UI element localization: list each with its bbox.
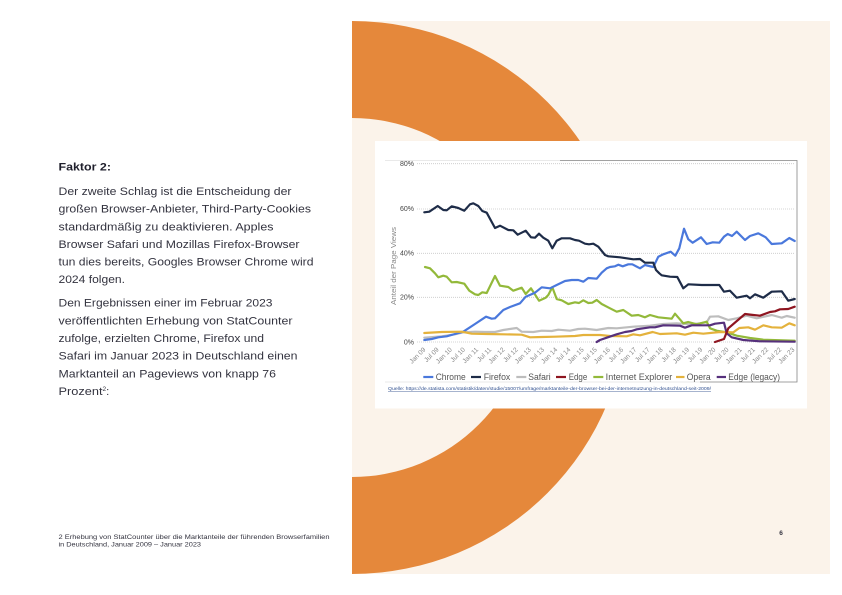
text block: second paragraph: Safari im Januar 2023 in Deutschland einen: [58, 351, 298, 363]
y axis labels and gridlines: 80%: [400, 161, 414, 168]
text block: second paragraph: veröffentlichten Erhebung von StatCounter: [58, 315, 293, 327]
text block: second paragraph: :: [106, 386, 109, 398]
text block: first paragraph: Der zweite Schlag ist die Entscheidung der: [58, 186, 292, 198]
x axis labels: Jul 12: [502, 346, 520, 364]
x axis labels: Jan 11: [462, 346, 480, 365]
series: Edge: [715, 307, 795, 342]
text block: second paragraph: [58, 298, 298, 398]
footnote: 2 Erhebung von StatCounter über die Marktanteile der führenden Browserfamilien: [58, 534, 330, 541]
x axis labels: Jul 09: [423, 346, 441, 364]
panel: beige background: [352, 21, 830, 574]
source link: Quelle: https://de.statista.com/statistik/daten/studie/15007/umfrage/marktanteile-der-browser-bei-der-internetnutzung-in-deutschland-seit-2009/: [388, 386, 712, 391]
x axis labels: Jan 18: [646, 346, 665, 365]
x axis labels: Jul 14: [555, 346, 573, 364]
series: Safari: [424, 315, 795, 338]
chart frame: [385, 160, 797, 382]
chart frame right edge: [560, 160, 797, 382]
text block: first paragraph: standardmäßig zu deaktivieren. Apples: [58, 221, 274, 233]
text block: first paragraph: tun dies bereits, Googles Browser Chrome wird: [58, 256, 314, 268]
heading: Faktor 2: Faktor 2:: [58, 162, 111, 174]
panel: chart card: [375, 141, 807, 408]
x axis labels: Jul 10: [450, 346, 467, 364]
text block: second paragraph: Prozent: [58, 386, 103, 398]
y axis labels and gridlines: 60%: [400, 206, 414, 213]
footnote: in Deutschland, Januar 2009 – Januar 2023: [58, 542, 201, 548]
x axis labels: Jan 17: [619, 346, 639, 365]
y axis labels and gridlines: 40%: [400, 251, 414, 258]
x axis labels: Jan 13: [514, 346, 533, 365]
x axis labels: Jan 09: [408, 346, 428, 365]
x axis labels: Jul 11: [476, 346, 494, 364]
text block: first paragraph: 2024 folgen.: [58, 274, 125, 286]
y axis title: Anteil der Page Views: [389, 227, 398, 305]
text block: first paragraph: [58, 186, 314, 286]
x axis labels: Jan 21: [725, 346, 744, 365]
x axis labels: Jan 23: [777, 346, 797, 365]
legend: Edge: [569, 372, 587, 382]
text block: first paragraph: großen Browser-Anbieter, Third-Party-Cookies: [58, 204, 311, 216]
y axis labels and gridlines: [400, 161, 795, 346]
series: Internet Explorer: [425, 267, 795, 341]
x axis labels: Jul 20: [713, 346, 731, 364]
legend: Internet Explorer: [606, 372, 672, 382]
legend: Safari: [528, 372, 551, 382]
text block: first paragraph: Browser Safari und Mozillas Firefox-Browser: [58, 239, 300, 251]
legend: Opera: [687, 372, 711, 382]
x axis labels: Jan 19: [672, 346, 691, 365]
decorative orange arc: [352, 21, 628, 574]
x axis labels: Jul 19: [687, 346, 704, 364]
x axis labels: Jul 13: [529, 346, 546, 364]
series: Firefox: [424, 203, 795, 301]
legend: Chrome: [436, 372, 466, 382]
x axis labels: Jan 15: [567, 346, 586, 365]
x axis labels: Jul 15: [581, 346, 599, 364]
x axis labels: Jul 21: [740, 346, 757, 364]
x axis labels: Jan 20: [698, 346, 718, 365]
line chart: browser market share: [389, 161, 797, 382]
page number: 6: [779, 530, 783, 537]
x axis labels: Jul 18: [660, 346, 678, 364]
text block: second paragraph: Marktanteil an Pageviews von knapp 76: [58, 368, 276, 380]
legend: Edge (legacy): [728, 372, 780, 382]
legend: Firefox: [484, 372, 511, 382]
y axis labels and gridlines: 0%: [404, 339, 414, 346]
x axis labels: Jan 12: [488, 346, 507, 365]
x axis labels: [408, 346, 797, 365]
x axis labels: Jul 22: [766, 346, 784, 364]
x axis labels: Jan 10: [435, 346, 454, 365]
series: Opera: [424, 323, 795, 337]
footnote: [58, 534, 330, 548]
text block: second paragraph: 2: [102, 386, 106, 393]
x axis labels: Jan 14: [540, 346, 559, 365]
x axis labels: Jan 16: [593, 346, 612, 365]
series: Edge (legacy): [597, 323, 795, 342]
text block: second paragraph: zufolge, erzielten Chrome, Firefox und: [58, 333, 264, 345]
x axis labels: Jul 17: [634, 346, 652, 364]
x axis labels: Jan 22: [751, 346, 770, 365]
series: Chrome: [424, 229, 795, 340]
y axis labels and gridlines: 20%: [400, 295, 414, 302]
legend: [423, 372, 780, 382]
text block: second paragraph: Den Ergebnissen einer im Februar 2023: [58, 298, 272, 310]
x axis labels: Jul 16: [608, 346, 625, 364]
